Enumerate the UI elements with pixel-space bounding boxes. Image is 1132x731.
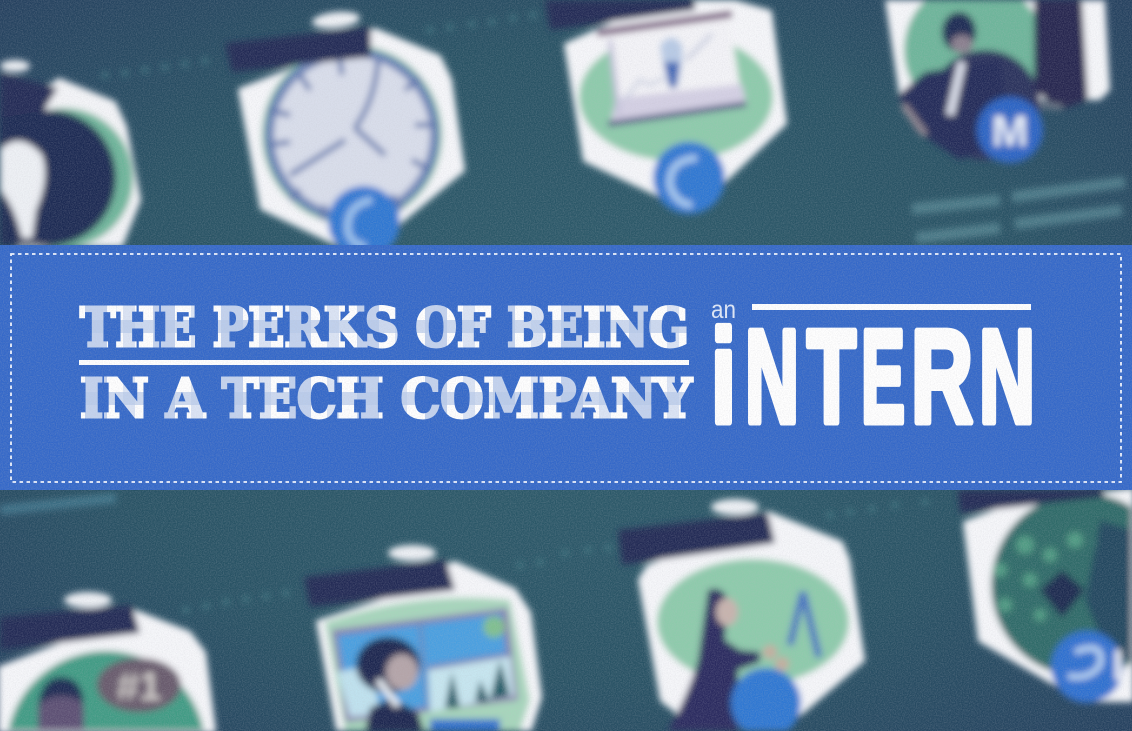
dotted banner border	[11, 254, 1121, 482]
word: an: an	[711, 296, 736, 324]
blurred body text lower left	[0, 498, 116, 510]
word: intern: R	[911, 303, 973, 450]
title: the perks of being in a tech company	[80, 297, 693, 430]
word: intern: E	[861, 303, 905, 450]
badge: number one	[0, 592, 214, 731]
badge: clock	[225, 10, 463, 258]
badge: number one: #1	[117, 665, 161, 709]
dotted connector lines	[102, 12, 928, 613]
badge: window and intern	[304, 545, 540, 731]
banner	[0, 245, 1132, 490]
word: intern: N	[745, 303, 799, 450]
badge: lightbulb	[0, 60, 139, 248]
word: intern	[711, 303, 1035, 450]
badge: mentor and intern	[885, 0, 1110, 163]
badge: mentor and intern: M	[992, 107, 1028, 156]
upper rule	[752, 304, 1031, 310]
title line 2: IN A TECH COMPANY	[80, 368, 693, 430]
word: intern: N	[979, 303, 1035, 450]
blurred body text top right	[912, 182, 1125, 238]
badge: teacher and board	[618, 499, 863, 731]
badge: presentation	[545, 0, 785, 214]
word: intern: T	[807, 303, 856, 450]
badge: tree and globe	[958, 490, 1132, 703]
title line 1: THE PERKS OF BEING	[80, 297, 689, 359]
word: intern: i	[711, 303, 736, 450]
title divider rule	[79, 360, 689, 365]
